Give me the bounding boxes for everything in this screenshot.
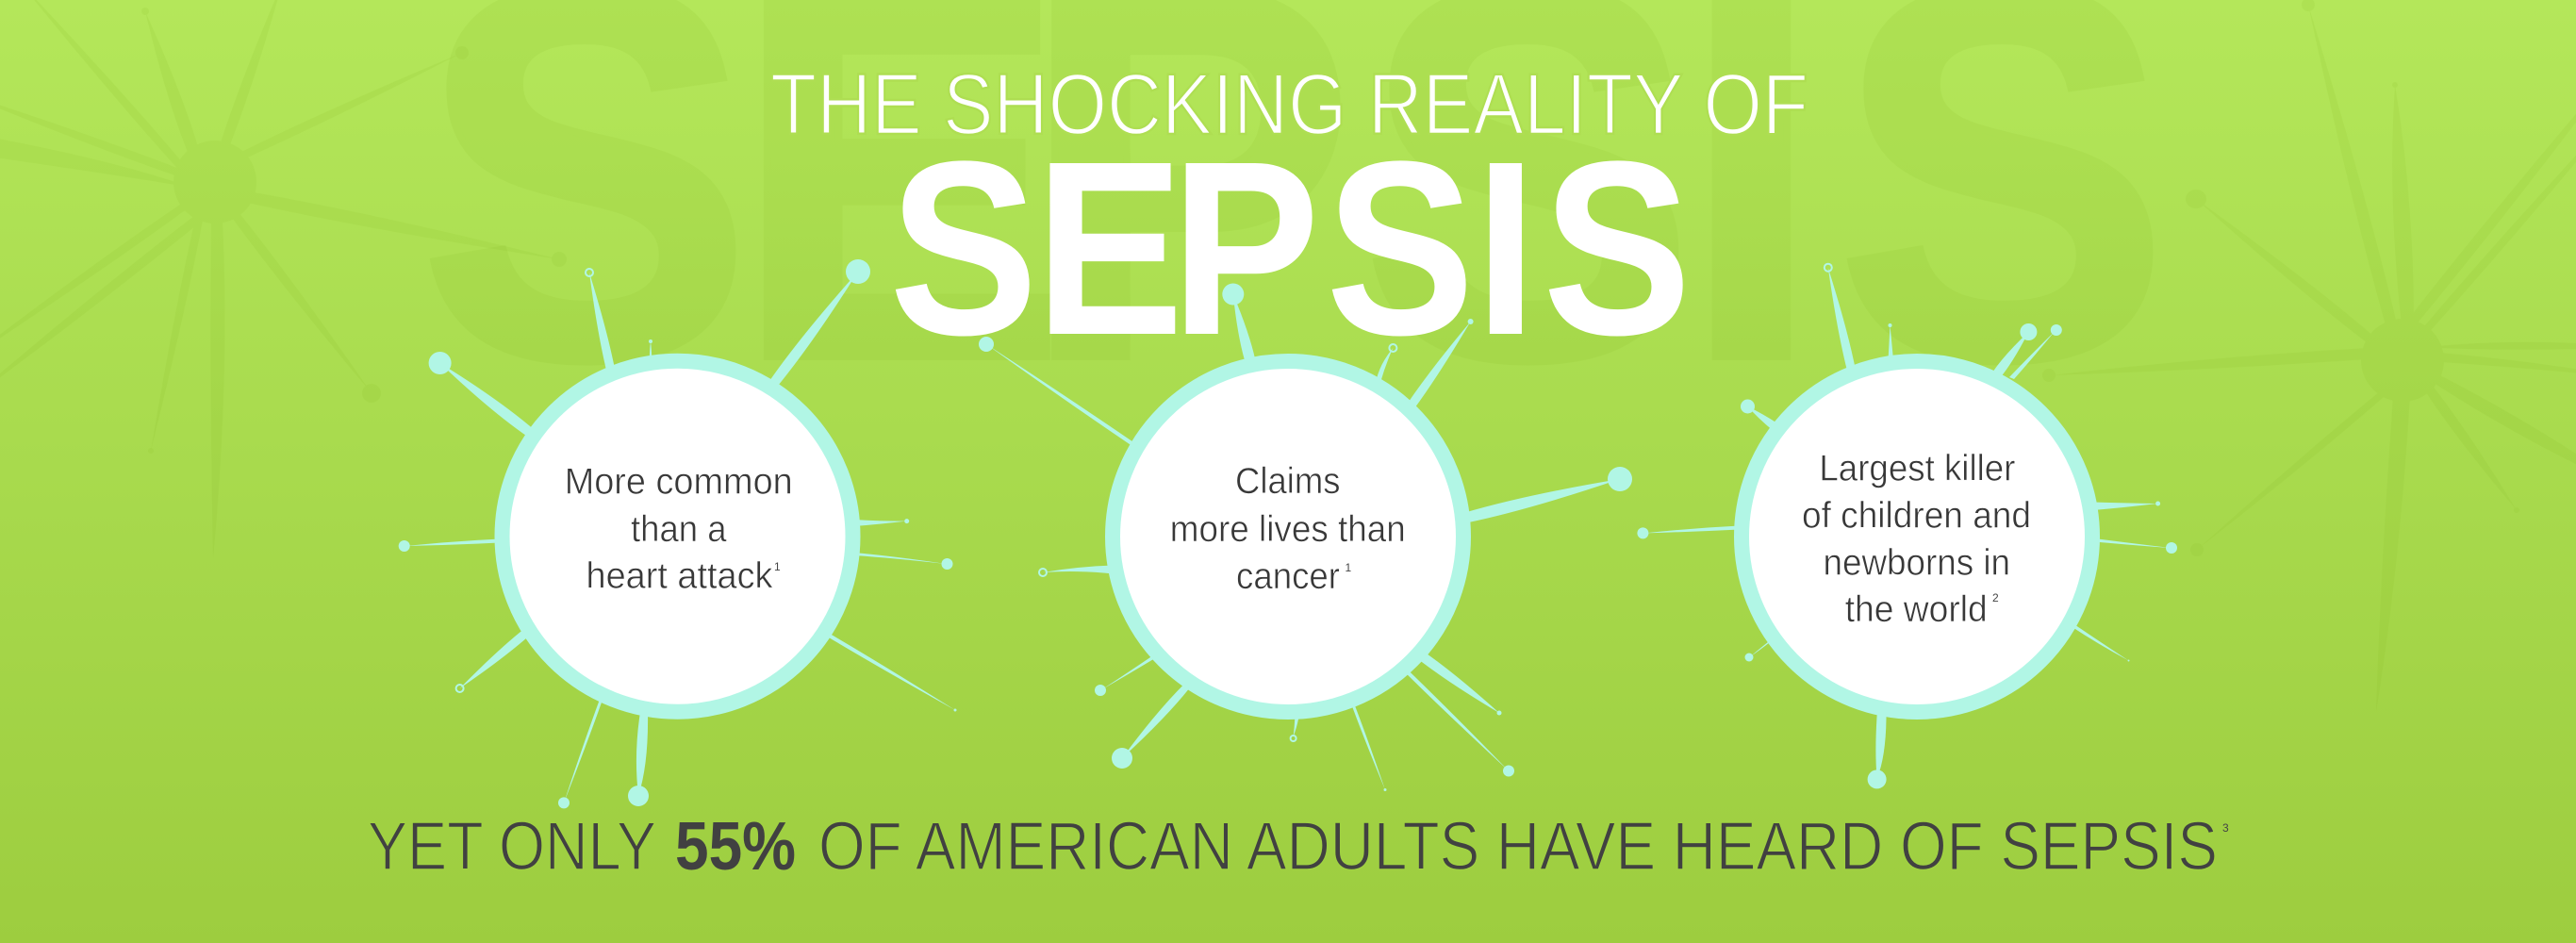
title word: SEPSIS — [889, 110, 1692, 388]
bottom statement — [368, 809, 2229, 885]
background cell: right — [2042, 0, 2576, 712]
cell text — [1170, 461, 1406, 597]
cell text: the world — [1845, 589, 1988, 630]
cell text: more lives than — [1170, 509, 1406, 550]
panel: more common than a heart attack — [399, 259, 956, 808]
cell text: cancer — [1236, 556, 1340, 597]
cell text — [1802, 449, 2031, 630]
panel: largest killer of children and newborns — [1637, 264, 2177, 788]
cell text: 1 — [1345, 561, 1352, 574]
cell body — [1742, 361, 2092, 712]
title line: THE SHOCKING REALITY OF — [770, 57, 1808, 153]
cell text: 2 — [1992, 591, 1999, 604]
cell text: 1 — [774, 560, 781, 573]
cell text: Claims — [1235, 461, 1341, 502]
bottom statement: 3 — [2222, 821, 2229, 835]
background cell: left — [0, 0, 567, 558]
panel: claims more lives than cancer — [979, 283, 1632, 791]
cell text: than a — [631, 509, 727, 550]
bottom statement: YET ONLY — [368, 809, 656, 885]
cell text: More common — [565, 462, 793, 503]
spikes — [1637, 264, 2177, 788]
spikes — [399, 259, 956, 808]
cell text — [565, 462, 793, 597]
cell text: newborns in — [1824, 542, 2010, 583]
cell body — [1113, 361, 1463, 712]
cell text: of children and — [1802, 496, 2031, 537]
cell body — [502, 361, 852, 712]
bottom statement: OF AMERICAN ADULTS HAVE HEARD OF SEPSIS — [818, 809, 2218, 885]
spikes — [979, 283, 1632, 791]
cell text: Largest killer — [1819, 449, 2015, 488]
cell text: heart attack — [586, 556, 773, 597]
bottom statement: 55% — [675, 809, 796, 885]
